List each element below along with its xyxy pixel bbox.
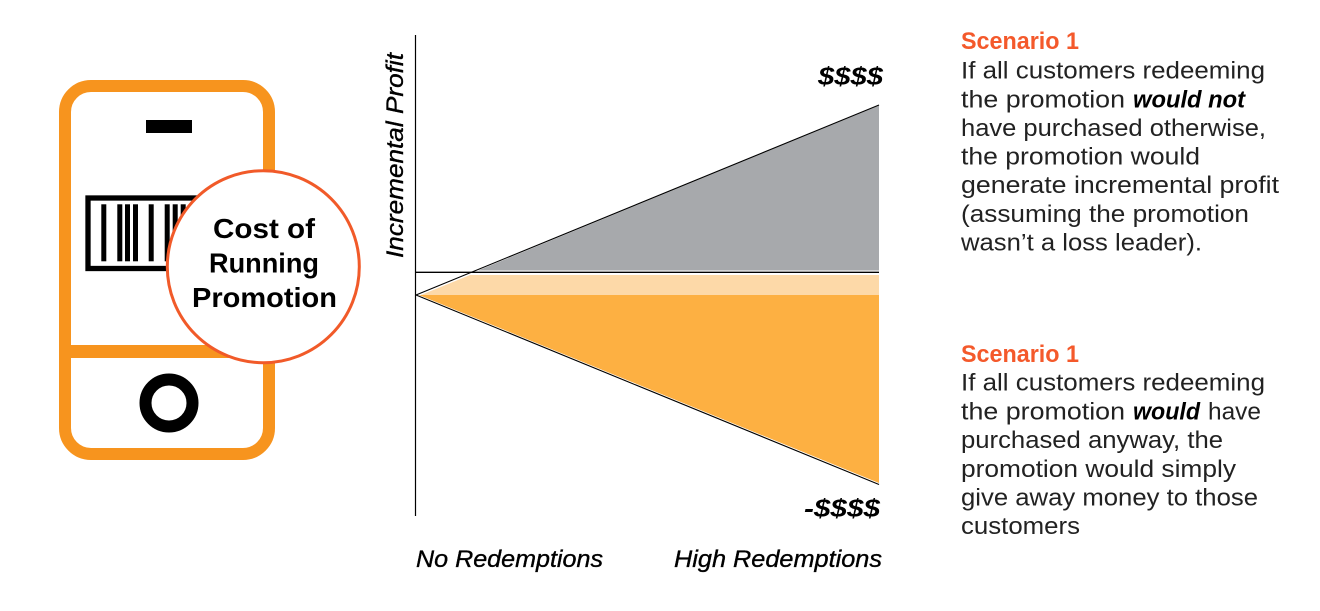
text block: scenario 1 upper: would not [1133, 86, 1246, 114]
chart: incremental profit vs redemptions [415, 35, 879, 516]
home button [146, 380, 192, 426]
phone divider [65, 345, 269, 358]
gray profit area [478, 106, 879, 270]
text block: scenario 1 lower: customers [961, 513, 1080, 540]
icon: smartphone with barcode [65, 86, 269, 454]
text block: scenario 1 lower: the promotion [961, 398, 1125, 426]
text block: scenario 1 lower: would [1133, 398, 1201, 426]
upper diagonal [416, 105, 879, 295]
text block: scenario 1 lower: Scenario 1 [961, 341, 1079, 368]
text block: scenario 1 lower: If all customers redeeming [961, 370, 1265, 396]
label: positive profit: $$$$ [817, 63, 884, 91]
callout: cost of running promotion: Running [209, 248, 319, 278]
callout: cost of running promotion: Cost of [213, 213, 316, 244]
text block: scenario 1 upper: generate incremental profit [961, 172, 1279, 199]
cost baseline [415, 271, 879, 273]
text block: scenario 1 lower: have [1208, 398, 1261, 426]
text block: scenario 1 upper: have purchased otherwise, [961, 115, 1266, 142]
axis label: incremental profit: Incremental Profit [382, 52, 409, 258]
label: no redemptions: No Redemptions [416, 546, 603, 573]
lower diagonal [416, 295, 879, 484]
text block: scenario 1 upper: the promotion [961, 86, 1125, 114]
callout: cost of running promotion: Promotion [192, 282, 337, 313]
text block: scenario 1 lower: purchased anyway, the [961, 427, 1223, 454]
text block: scenario 1 upper: If all customers redeeming [961, 58, 1265, 84]
text block: scenario 1 lower: promotion would simply [961, 456, 1236, 483]
text block: scenario 1 upper: the promotion would [961, 144, 1200, 170]
y axis [414, 35, 416, 516]
text block: scenario 1 upper: (assuming the promotion [961, 201, 1249, 228]
text block: scenario 1 upper: Scenario 1 [961, 28, 1079, 55]
text block: scenario 1 upper: wasn’t a loss leader). [960, 230, 1202, 256]
phone speaker [146, 120, 192, 133]
phone body [65, 86, 269, 454]
label: high redemptions: High Redemptions [674, 546, 882, 573]
barcode [88, 198, 208, 268]
text block: scenario 1 lower [961, 341, 1265, 540]
text block: scenario 1 upper [960, 28, 1279, 256]
label: negative profit: -$$$$ [804, 495, 881, 523]
text block: scenario 1 lower: give away money to those [961, 484, 1258, 512]
light peach area [421, 275, 879, 295]
callout: cost of running promotion [167, 171, 359, 363]
orange loss area [419, 295, 879, 483]
